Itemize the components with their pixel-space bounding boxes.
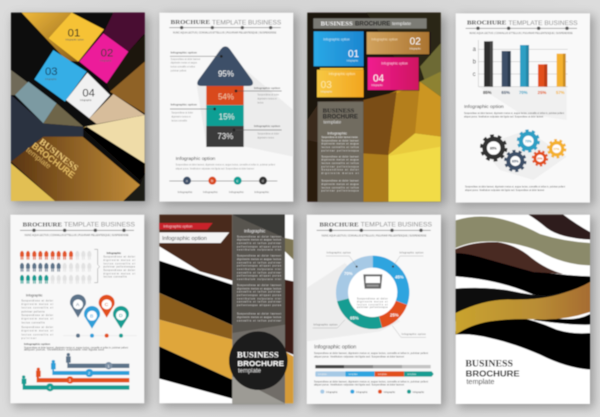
title circle <box>229 331 288 390</box>
translucent text panel: Suspendisse at dolor <box>321 169 359 172</box>
infographic copy: pellentesque aliquet purus <box>237 304 282 307</box>
pin B <box>84 306 100 329</box>
progress bars: template <box>349 373 358 376</box>
translucent text panel: pulvinar pellentesque <box>321 165 359 168</box>
infographic copy: pellentesque aliquet purus <box>237 294 282 297</box>
callout bottom right <box>392 326 426 337</box>
infographic copy: convallis et tellus pulvinar <box>237 291 281 294</box>
infographic text block: Suspendisse at dolor <box>21 314 53 317</box>
header: TEMPLATE BUSINESS <box>361 222 432 229</box>
timeline a b c d: b <box>211 178 214 183</box>
infographic copy: Suspendisse at dolor laoreet <box>237 255 281 258</box>
bar chart <box>473 40 568 120</box>
translucent text panel: lectus convallis et tellus <box>321 186 359 189</box>
callout top left: Suspendisse at dolor laoreet <box>171 58 201 61</box>
infographic text block <box>21 294 53 340</box>
header: TEMPLATE BUSINESS <box>508 20 578 27</box>
donut chart <box>342 262 403 323</box>
infographic text block: Suspendisse at dolor <box>21 299 53 302</box>
infographic text block: lectus convallis et <box>21 307 53 310</box>
donut centre text: dignissim metus et <box>357 301 388 304</box>
wave: black band <box>456 250 590 305</box>
panel: donut chart <box>307 215 441 404</box>
step line 3: 3 <box>69 378 72 383</box>
diamond 04: 04 <box>82 87 95 99</box>
translucent text panel: lectus convallis et tellus <box>321 162 359 165</box>
translucent text panel: dignissim metus et <box>321 172 359 175</box>
step line 4: 4 <box>49 385 52 390</box>
timeline a b c d: a <box>186 178 189 183</box>
diamond 01 <box>48 13 104 62</box>
donut centre text <box>357 298 388 309</box>
card 04: 04 <box>373 74 385 85</box>
card 04: Infographic <box>371 84 384 87</box>
legend <box>320 390 425 394</box>
progress bars: template <box>378 373 388 376</box>
title bar: template <box>392 21 411 27</box>
footer text: Suspendisse at dolor laoreet, dignissim metus et, augue lectus, convallis et tellus in, pulvinar pellent <box>465 185 565 188</box>
translucent text panel: dignissim metus et augue <box>321 143 359 146</box>
header <box>169 19 281 34</box>
header: NUNC AQUA LECTUS | CONVALLIS ETTELLUS | PULVINAR PELLENTESQUE | SUSPENDISSE <box>322 234 427 237</box>
header <box>466 20 578 35</box>
timeline a b c d <box>169 177 277 194</box>
donut centre text: Suspendisse at dolor <box>357 298 388 301</box>
footer text <box>465 185 565 192</box>
progress bars <box>315 365 434 377</box>
callout bottom left <box>313 320 345 328</box>
infographic copy: vestibulum vulputate nisi <box>237 278 281 281</box>
infographic option text: aliquet purus. Vestibulum vulputate nisi ligula sed <box>24 349 105 352</box>
infographic option text: Infographic option <box>464 104 504 110</box>
translucent text panel: lectus convallis et tellus <box>321 146 359 149</box>
bracket with text: lectus convallis <box>103 276 127 279</box>
pin D: D <box>119 313 123 319</box>
translucent text panel: pulvinar pellentesque <box>321 190 359 193</box>
infographic copy: pellentesque aliquet purus <box>237 245 282 248</box>
infographic copy: Suspendisse at dolor laoreet <box>237 235 281 238</box>
diamond 04 <box>66 73 110 118</box>
translucent text panel: template <box>323 120 342 125</box>
donut centre text: pulvinar pellentesque <box>357 306 388 309</box>
infographic option text <box>24 342 128 352</box>
infographic copy: dignissim metus et augue lectus <box>237 316 282 319</box>
translucent text panel: Suspendisse at dolor laoreet <box>321 180 359 183</box>
callout right upper: dignissim metus et <box>257 98 277 101</box>
infographic copy: convallis et tellus pulvinar <box>237 271 281 274</box>
donut labels: 70% <box>344 271 353 276</box>
infographic text block: Suspendisse at dolor <box>21 326 53 329</box>
header: BROCHURE <box>171 19 211 26</box>
footer text: aliquet purus. Vestibulum vulputate nisi ligula sed. Suspendisse at dolor laoreet <box>465 189 545 192</box>
callout top left: dignissim metus et augue <box>171 61 198 64</box>
translucent text panel: dignissim metus et augue <box>321 183 359 186</box>
wave: brown band <box>456 242 563 274</box>
infographic option text: Suspendisse at dolor laoreet, dignissim metus et, augue lectus, convallis et tellus in, pulvinar pellent <box>314 352 428 355</box>
legend: Infographic <box>413 391 425 394</box>
header: TEMPLATE BUSINESS <box>64 222 135 229</box>
donut labels: 45% <box>395 274 404 279</box>
infographic copy: vestibulum vulputate nisi <box>237 268 281 271</box>
infographic copy: dignissim metus et augue lectus <box>237 258 282 261</box>
wave: olive band <box>456 216 590 265</box>
title circle: BUSINESS <box>237 350 279 359</box>
infographic option text: aliquet purus. Vestibulum vulputate nisi ligula sed. Suspendisse at dolor laoreet <box>176 167 254 170</box>
timeline a b c d: Infographic <box>178 190 193 194</box>
card 02: Infographic <box>409 47 422 50</box>
header: BROCHURE <box>23 221 63 228</box>
bracket with text: pulvinar pellentesque <box>103 266 136 269</box>
panel: wave cover <box>456 215 590 404</box>
bracket with text <box>94 249 136 283</box>
header: BROCHURE <box>319 221 359 228</box>
callout left lower: Infographic option <box>171 103 197 107</box>
legend copy: aliquet purus. Vestibulum vulputate nisi ligula sed. Suspendisse at dolor laoreet <box>314 384 404 387</box>
callout right upper: lectus <box>257 102 264 105</box>
pin D <box>113 306 129 329</box>
infographic copy: convallis et tellus pulvinar <box>237 301 281 304</box>
callout right lower: dignissim metus <box>257 136 275 139</box>
step line 4 <box>22 375 129 391</box>
translucent text panel: BUSINESS <box>323 108 355 114</box>
infographic option text <box>464 104 564 119</box>
callout top right <box>392 252 424 268</box>
panel: people pictograms, pins and steps <box>10 215 144 403</box>
legend: Infographic <box>326 391 338 394</box>
panel: cover with numbered diamonds <box>11 13 145 201</box>
pin dots <box>63 334 137 338</box>
bracket with text: Infographic <box>107 251 122 255</box>
infographic copy: vestibulum vulputate nisi <box>237 249 281 252</box>
gear 25%: 25% <box>537 156 543 160</box>
infographic option text: Infographic option <box>176 156 216 162</box>
wave: thin black streak <box>533 314 590 325</box>
bracket with text: Suspendisse at dolor <box>103 256 135 259</box>
infographic copy: Suspendisse at dolor laoreet <box>237 313 281 316</box>
translucent text panel: Infographic <box>327 130 347 135</box>
people pictogram rows <box>20 251 91 284</box>
callout top left: Infographic option <box>171 50 197 54</box>
wave: lower black band <box>456 315 590 370</box>
title circle: template <box>238 369 262 375</box>
legend: Infographic <box>384 391 396 394</box>
infographic copy: dignissim metus et augue lectus <box>237 287 282 290</box>
bracket with text: dignissim metus et <box>103 272 135 275</box>
translucent text panel: BROCHURE <box>323 114 358 120</box>
infographic text block: dignissim metus et <box>21 303 53 306</box>
arrow segment 73% <box>206 126 244 147</box>
callout right lower: Suspendisse at dolor <box>257 132 279 135</box>
arrow segment 54%: 54% <box>218 92 234 101</box>
legend copy <box>314 380 428 387</box>
step line 1 <box>66 353 129 369</box>
infographic copy: convallis et tellus pulvinar <box>237 261 281 264</box>
gear 70%: 70% <box>525 139 532 143</box>
legend copy: Suspendisse at dolor laoreet, dignissim metus et, augue lectus, convallis et tellus in, pulvinar pellent <box>314 380 428 383</box>
timeline a b c d: Infographic <box>229 190 244 194</box>
card 03 <box>317 68 365 98</box>
infographic option text <box>176 156 275 170</box>
title bar: BUSINESS <box>321 21 353 27</box>
red tag: Infographic option <box>163 225 192 229</box>
panel: diagonal stripes cover <box>159 215 293 405</box>
bar chart: a <box>473 47 477 53</box>
infographic copy: convallis et tellus pulvinar <box>237 242 281 245</box>
diamond 03: 03 <box>45 66 58 78</box>
arrow head 95% <box>197 46 253 86</box>
diamond 03: Infographic <box>45 78 57 81</box>
translucent text panel <box>318 102 363 202</box>
timeline a b c d: Infographic <box>203 190 218 194</box>
translucent text panel: dignissim metus et augue <box>321 159 359 162</box>
header: TEMPLATE BUSINESS <box>212 19 281 26</box>
card 04: Infographic option <box>381 62 408 66</box>
step line 1: 1 <box>107 363 110 368</box>
cover title: template <box>466 377 494 386</box>
infographic copy: Suspendisse at dolor laoreet <box>237 284 281 287</box>
gear 65%: 65% <box>512 159 519 163</box>
progress bars: template <box>407 373 417 376</box>
cover title: BROCHURE <box>30 141 77 180</box>
bar chart: 25% <box>538 90 546 95</box>
infographic text block: pulvinar <box>21 337 37 340</box>
translucent text panel: Suspendisse at dolor laoreet <box>321 155 359 158</box>
infographic copy <box>237 229 282 322</box>
timeline a b c d: d <box>262 178 264 183</box>
infographic text block: dignissim metus et <box>21 330 53 333</box>
card 04 <box>368 57 419 91</box>
callout top left: Infographic option <box>327 252 351 255</box>
bracket with text: Suspendisse at dolor <box>103 269 135 272</box>
donut labels: 25% <box>390 313 399 318</box>
infographic copy: vestibulum vulputate nisi <box>237 297 281 300</box>
infographic copy: dignissim metus et augue lectus <box>237 239 282 242</box>
pin C <box>99 295 115 318</box>
infographic option text: Suspendisse at dolor laoreet, dignissim metus et, augue lectus, convallis et tellus in, pulvinar pellent <box>464 112 564 115</box>
card 03: Infographic option <box>329 72 355 76</box>
card 03: Infographic <box>321 91 333 94</box>
bar chart: 57% <box>556 90 565 95</box>
infographic option text: Infographic option <box>24 342 50 346</box>
title circle: BROCHURE <box>237 359 284 368</box>
callout right upper: Infographic option <box>254 86 280 90</box>
step line 2 <box>51 360 129 377</box>
white tag <box>159 232 229 243</box>
pin C: C <box>105 302 109 308</box>
callout top left <box>326 252 358 268</box>
infographic text block: dignissim metus et <box>21 318 53 321</box>
arrow segment 15%: 15% <box>219 112 235 121</box>
header <box>20 221 135 237</box>
callout left lower: lectus convallis <box>171 119 188 122</box>
timeline a b c d: c <box>236 178 238 183</box>
diamond 04: Infographic <box>80 99 92 102</box>
donut labels <box>344 271 404 321</box>
title bar: BROCHURE <box>355 21 390 27</box>
callout top left <box>170 50 223 72</box>
callout top right: Infographic option <box>399 252 424 255</box>
bar chart: 85% <box>483 90 492 95</box>
diamond 02: Infographic <box>100 59 112 62</box>
infographic option text: Infographic option <box>314 344 356 350</box>
white tag: Infographic option <box>162 236 207 242</box>
gear 85%: 85% <box>490 146 497 150</box>
infographic copy: pellentesque aliquet purus <box>237 275 282 278</box>
pin B: B <box>90 313 94 319</box>
panel: low-poly cover with cards <box>307 13 441 202</box>
infographic text block: lectus convallis et <box>21 333 53 336</box>
infographic text block: Infographic <box>26 294 43 298</box>
arrow segment 73%: 73% <box>217 132 233 141</box>
arrow segment 54% <box>206 86 244 105</box>
title bar <box>313 18 427 29</box>
diamond 02: 02 <box>101 48 113 60</box>
cover title <box>24 133 82 186</box>
card 02 <box>367 32 431 55</box>
callout bottom right: Infographic option <box>402 333 426 336</box>
bar chart: 65% <box>501 90 510 95</box>
header: BROCHURE <box>467 20 507 27</box>
diamond 03 <box>34 50 87 102</box>
pin A <box>70 294 86 318</box>
donut centre text: lectus convallis et <box>357 304 388 307</box>
card 02: 02 <box>410 37 421 48</box>
diamond 02 <box>79 33 128 83</box>
header: NUNC AQUA LECTUS | CONVALLIS ETTELLUS | PULVINAR PELLENTESQUE | SUSPENDISSE <box>173 31 277 34</box>
donut labels: 65% <box>350 316 359 321</box>
header: NUNC AQUA LECTUS | CONVALLIS ETTELLUS | PULVINAR PELLENTESQUE | SUSPENDISSE <box>469 32 573 35</box>
diamond 01: Infographic option <box>65 38 85 41</box>
callout right lower <box>233 124 282 139</box>
wave: dark brown top right <box>528 215 590 240</box>
infographic copy: convallis et tellus pulvinar <box>237 319 281 322</box>
translucent text panel: pulvinar pellentesque <box>321 149 359 152</box>
header: NUNC AQUA LECTUS | CONVALLIS ETTELLUS | PULVINAR PELLENTESQUE | SUSPENDISSE <box>25 234 129 237</box>
card 01 <box>314 31 365 67</box>
header <box>317 221 432 237</box>
legend: Infographic <box>356 391 368 394</box>
callout right lower: Infographic option <box>254 124 280 128</box>
card 03: 03 <box>321 80 332 91</box>
gear 57%: 57% <box>553 147 560 151</box>
infographic text block: pulvinar pellente <box>21 310 45 313</box>
cover title: BUSINESS <box>465 359 513 370</box>
infographic option text: Suspendisse at dolor laoreet, dignissim metus et, augue lectus, convallis et tellus in, pulvinar pellent <box>176 164 275 167</box>
bracket with text: dignissim metus et <box>103 259 135 262</box>
callout bottom left: Infographic option <box>313 324 338 327</box>
panel: arrow infographic <box>159 13 293 202</box>
bar chart: b <box>473 60 477 66</box>
callout right upper <box>235 86 282 105</box>
bar chart: 70% <box>519 90 528 95</box>
timeline a b c d: Infographic <box>254 190 270 194</box>
diamond 01: 01 <box>68 27 80 39</box>
step line 2: 2 <box>88 371 91 376</box>
icon: laptop <box>363 274 382 289</box>
infographic option text: aliquet purus. Vestibulum vulputate nisi ligula sed. Suspendisse at dolor laoreet <box>464 116 544 119</box>
infographic text block: lectus convallis <box>21 321 45 324</box>
cover title: BROCHURE <box>466 368 520 378</box>
red tag <box>159 223 213 230</box>
cover title: BUSINESS <box>37 136 80 173</box>
card 02: Infographic option <box>371 37 398 41</box>
progress bars: template <box>318 373 328 376</box>
card 01: Infographic option <box>323 38 350 42</box>
callout left lower <box>170 103 216 122</box>
callout right upper: Suspendisse at dolor <box>257 94 279 97</box>
gears <box>480 130 567 180</box>
arrow segment 15% <box>206 105 244 126</box>
bracket with text: lectus convallis et <box>103 262 135 265</box>
wave: second black band <box>456 283 590 321</box>
infographic option text <box>314 344 428 359</box>
bar chart: c <box>473 72 476 78</box>
cover title <box>465 359 520 386</box>
callout left lower: Suspendisse at dolor <box>171 111 193 114</box>
translucent text panel: Suspendisse at dolor laoreet metus <box>321 136 359 139</box>
cover title: template <box>24 145 53 171</box>
infographic option text: aliquet purus. Vestibulum vulputate nisi ligula sed. Suspendisse at dolor laoreet <box>314 356 404 359</box>
step line 3 <box>36 368 129 384</box>
callout top left: lectus convallis et tellus <box>171 66 196 69</box>
wave: gold band <box>456 282 590 335</box>
card 01: Infographic <box>347 60 359 63</box>
pin A: A <box>76 302 80 308</box>
translucent text panel: Suspendisse at dolor laoreet <box>321 139 359 142</box>
panel: bar chart and gears <box>456 13 590 203</box>
callout left lower: dignissim metus et <box>171 115 191 118</box>
arrow head 95%: 95% <box>218 70 234 79</box>
infographic option text: Suspendisse at dolor laoreet, dignissim metus et, augue lectus, convallis et tellus in, pulvinar pellent <box>24 346 128 349</box>
card 01: 01 <box>348 49 360 60</box>
infographic copy: pellentesque aliquet purus <box>237 265 282 268</box>
callout top left: pulvinar pellent <box>171 69 187 72</box>
infographic copy: Infographic <box>244 229 266 234</box>
